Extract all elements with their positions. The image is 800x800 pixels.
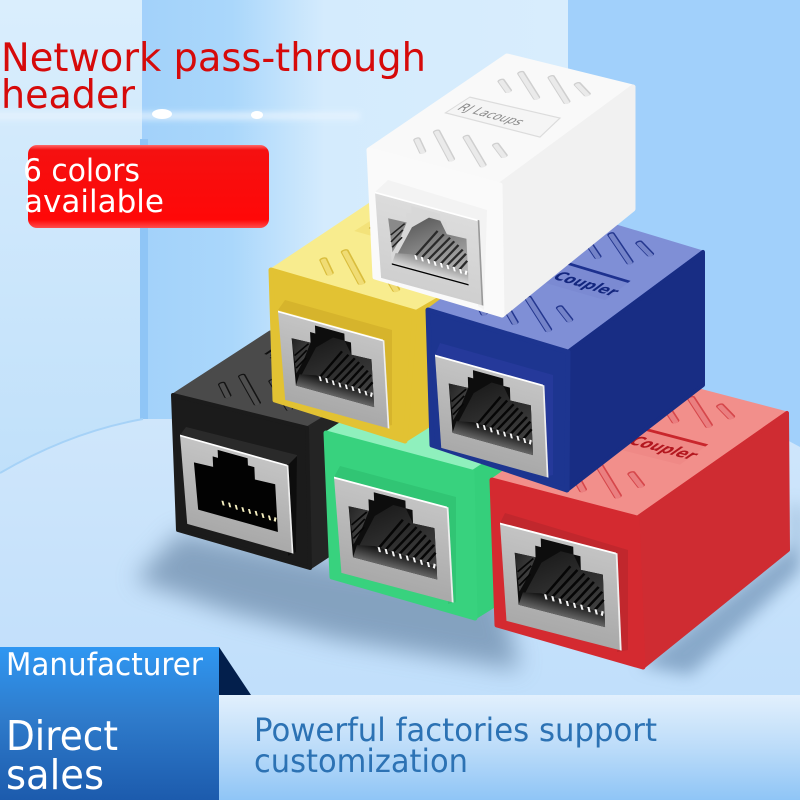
connector: black: [173, 311, 415, 568]
title: [1, 36, 426, 118]
blue panel: manufacturer direct sales: [0, 647, 219, 800]
connector: yellow: [271, 170, 560, 441]
connector: green: [326, 385, 520, 618]
footer text: customization: [254, 711, 657, 780]
light footer band: [219, 695, 800, 800]
product label: Lacoups: RJ Lacoups: [453, 102, 529, 128]
badge: 6 colors available: 6 colors: [23, 153, 140, 189]
label recess: [445, 95, 566, 138]
product label: RJ45Coupler: [259, 345, 366, 378]
blue panel: manufacturer direct sales: Manufacturer: [6, 647, 203, 683]
connector: white: [369, 56, 633, 315]
footer text: customization: customization: [254, 742, 468, 780]
fold triangle: [219, 647, 251, 695]
footer text: customization: Powerful factories support: [254, 711, 657, 749]
title: header: [1, 73, 136, 118]
connector: red: [492, 375, 788, 667]
product label: RJ45Coupler: RJ45Coupler: [513, 258, 625, 299]
title: Network pass-through: [1, 36, 426, 81]
blue panel: manufacturer direct sales: sales: [6, 751, 104, 799]
connector: blue: [428, 210, 703, 490]
badge: 6 colors available: [23, 145, 269, 228]
product label: RJ45Coupler: [364, 219, 478, 258]
blue panel: manufacturer direct sales: Direct: [6, 712, 118, 760]
badge: 6 colors available: available: [24, 184, 164, 220]
product label: RJ45Coupler: RJ45Coupler: [587, 424, 705, 462]
